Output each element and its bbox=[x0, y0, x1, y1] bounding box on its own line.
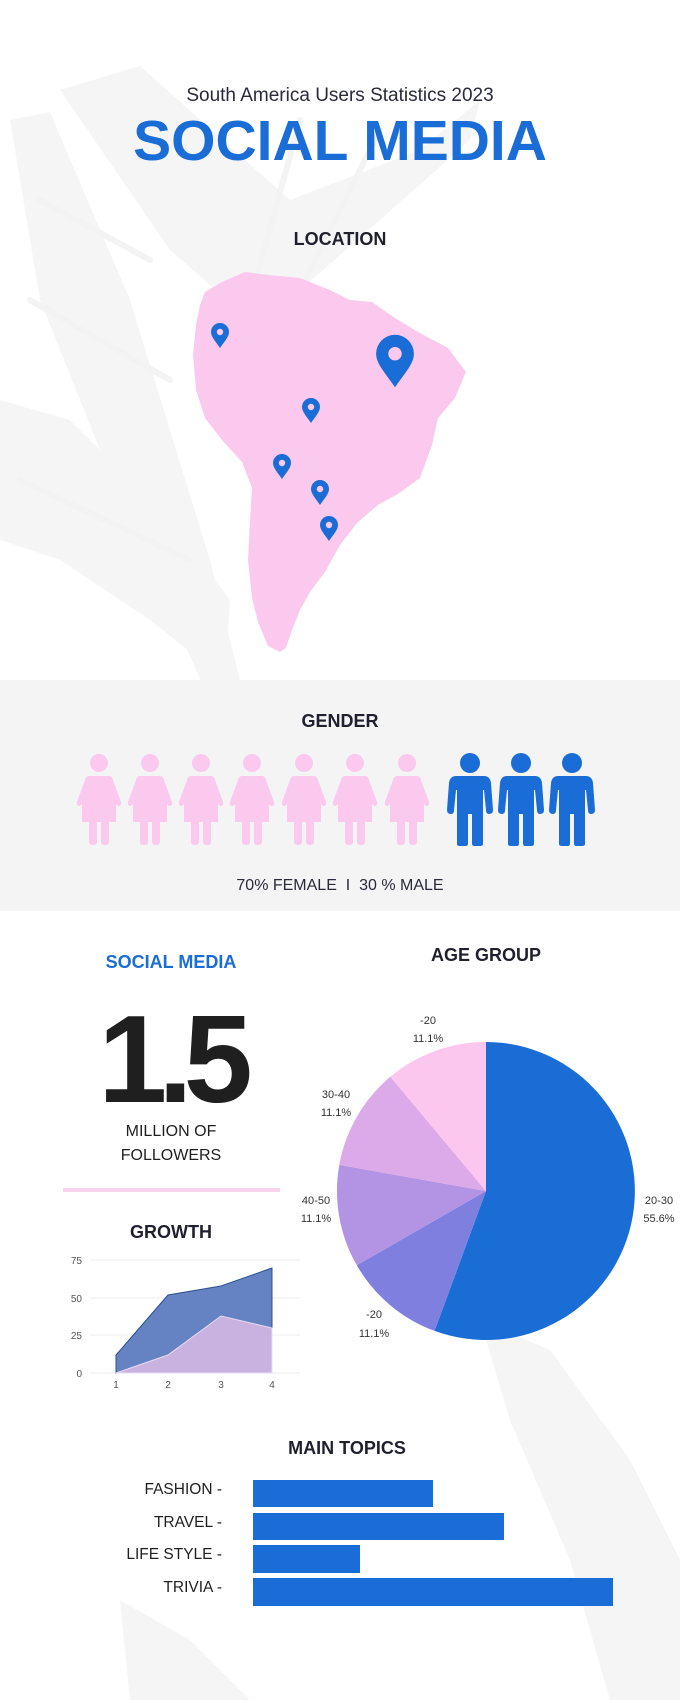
chart: growth area: 25 bbox=[71, 1331, 82, 1342]
text: followers: FOLLOWERS bbox=[121, 1147, 221, 1164]
heading: main topics: MAIN TOPICS bbox=[288, 1438, 406, 1458]
text: followers bbox=[121, 1123, 221, 1164]
chart: age pie: 40-50 bbox=[302, 1195, 330, 1207]
text: gender split: 70% FEMALE I 30 % MALE bbox=[236, 877, 444, 894]
pins bbox=[211, 323, 414, 541]
subtitle: South America Users Statistics 2023 bbox=[186, 85, 494, 106]
title: SOCIAL MEDIA bbox=[133, 109, 547, 173]
chart: age pie: 30-40 bbox=[322, 1089, 350, 1101]
chart: growth area: 50 bbox=[71, 1294, 82, 1305]
heading: age group: AGE GROUP bbox=[431, 945, 541, 965]
chart: age pie: 55.6% bbox=[643, 1213, 675, 1225]
big number: 1.5 bbox=[98, 991, 244, 1129]
chart: growth area: 0 bbox=[76, 1369, 82, 1380]
chart: age pie: -20 bbox=[366, 1309, 382, 1321]
chart: age pie: -20 bbox=[420, 1015, 436, 1027]
map: South America with pins bbox=[193, 272, 466, 652]
heading: gender: GENDER bbox=[301, 711, 378, 731]
bar chart: topics: TRAVEL - bbox=[154, 1514, 222, 1531]
chart: age pie: 20-30 bbox=[645, 1195, 673, 1207]
chart: growth area: 75 bbox=[71, 1256, 82, 1267]
chart: growth area: 3 bbox=[218, 1380, 224, 1391]
heading: growth: GROWTH bbox=[130, 1222, 212, 1242]
divider pink bbox=[63, 1188, 280, 1192]
chart: growth area bbox=[71, 1256, 300, 1391]
panel: gender bbox=[0, 680, 680, 911]
bar chart: topics: LIFE STYLE - bbox=[126, 1546, 222, 1563]
chart: growth area: 4 bbox=[269, 1380, 275, 1391]
icons: people bbox=[76, 753, 595, 846]
bar chart: topics bbox=[126, 1480, 613, 1606]
chart: age pie: 11.1% bbox=[413, 1033, 443, 1045]
heading: location: LOCATION bbox=[294, 229, 386, 249]
heading: social media: SOCIAL MEDIA bbox=[106, 952, 236, 972]
text: followers: MILLION OF bbox=[126, 1123, 216, 1140]
chart: growth area: 2 bbox=[165, 1380, 171, 1391]
bar chart: topics: FASHION - bbox=[144, 1481, 222, 1498]
chart: age pie: 11.1% bbox=[359, 1328, 389, 1340]
map shape bbox=[193, 272, 466, 652]
chart: age pie: 11.1% bbox=[301, 1213, 331, 1225]
bar chart: topics: TRIVIA - bbox=[163, 1579, 222, 1596]
chart: growth area: 1 bbox=[113, 1380, 119, 1391]
chart: age pie: 11.1% bbox=[321, 1107, 351, 1119]
